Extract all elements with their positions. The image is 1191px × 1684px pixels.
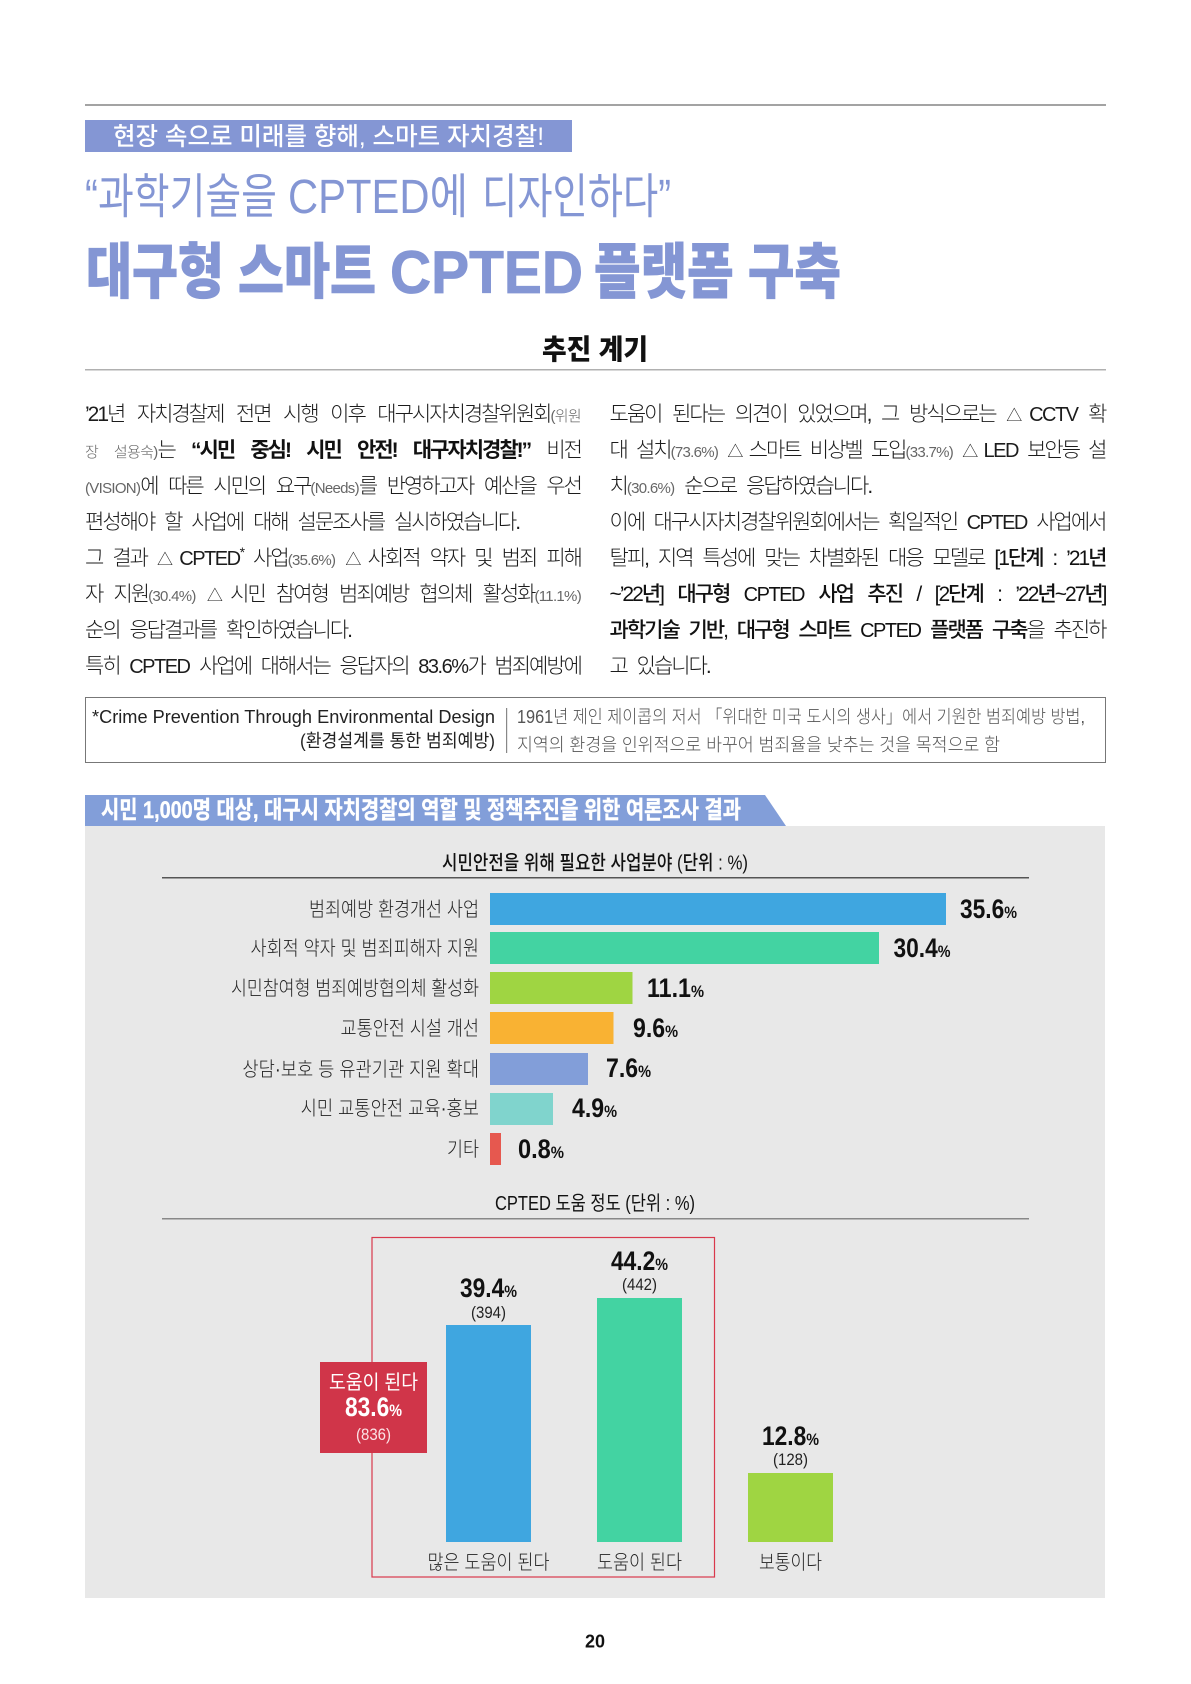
- text block: right column: 도움이 된다는 의견이 있었으며, 그 방식으로는 △CCTV 확: [610, 403, 1106, 426]
- text block: left column: 편성해야 할 사업에 대해 설문조사를 실시하였습니다.: [85, 511, 519, 534]
- bar: counseling and protection: [242, 1053, 651, 1085]
- callout: helpful total: 83.6%: [345, 1392, 402, 1422]
- text block: left column: 순의 응답결과를 확인하였습니다.: [85, 619, 351, 642]
- text block: left column: 특히 CPTED 사업에 대해서는 응답자의 83.6%가 범죄예방에: [85, 655, 581, 678]
- bar: crime prevention environment: 35.6%: [960, 894, 1017, 924]
- bar: traffic education: 4.9%: [572, 1093, 617, 1123]
- column: helpful: (442): [622, 1275, 657, 1294]
- column: helpful: 도움이 된다: [597, 1551, 682, 1574]
- bar: citizen council: [231, 972, 704, 1004]
- column: very helpful: [428, 1273, 550, 1574]
- text block: right column: [610, 403, 1107, 678]
- bar: counseling and protection: 7.6%: [606, 1053, 651, 1083]
- text block: left column: [85, 403, 581, 678]
- column: average: 12.8%: [762, 1421, 819, 1451]
- column: very helpful: 많은 도움이 된다: [428, 1551, 550, 1574]
- chart title: CPTED helpfulness: CPTED 도움 정도 (단위 : %): [495, 1192, 695, 1215]
- bar: citizen council: 11.1%: [647, 973, 704, 1003]
- main title: CPTED: [390, 239, 583, 306]
- bar: vulnerable and victim support: 30.4%: [894, 933, 950, 963]
- bar: traffic education: 시민 교통안전 교육·홍보: [301, 1097, 479, 1120]
- column: helpful: [597, 1246, 682, 1574]
- subtitle: 디자인하다”: [482, 171, 671, 224]
- text block: left column: 그 결과 △CPTED* 사업(35.6%) △사회적 약자 및 범죄 피해: [85, 544, 581, 570]
- text block: left column: 장 설용숙)는 “시민 중심! 시민 안전! 대구자치경찰!” 비전: [85, 439, 581, 462]
- text block: right column: 이에 대구시자치경찰위원회에서는 획일적인 CPTED 사업에서: [610, 511, 1106, 534]
- chart title: needed business areas: 시민안전을 위해 필요한 사업분야 (단위 : %): [442, 852, 748, 874]
- bar: vulnerable and victim support: 사회적 약자 및 범죄피해자 지원: [250, 937, 479, 960]
- bar: vulnerable and victim support: [250, 932, 950, 964]
- section tag: 현장 속으로 미래를 향해, 스마트 자치경찰!: [113, 123, 544, 151]
- text block: left column: (VISION)에 따른 시민의 요구(Needs)를 반영하고자 예산을 우선: [85, 475, 581, 498]
- callout: helpful total: [320, 1362, 427, 1453]
- text block: left column: ’21년 자치경찰제 전면 시행 이후 대구시자치경찰위원회(위원: [85, 403, 581, 426]
- column: average: [748, 1421, 833, 1574]
- main title: 플랫폼 구축: [594, 239, 841, 306]
- bar: traffic safety facilities: 9.6%: [633, 1013, 678, 1043]
- subtitle: [85, 171, 671, 224]
- footnote box: 1961년 제인 제이콥의 저서 「위대한 미국 도시의 생사」에서 기원한 범죄예방 방법,: [517, 707, 1085, 727]
- bar: other: 0.8%: [518, 1134, 564, 1164]
- red bracket frame: [372, 1238, 714, 1577]
- column: average: (128): [773, 1450, 808, 1469]
- bar: traffic safety facilities: 교통안전 시설 개선: [340, 1017, 479, 1040]
- footnote box: [86, 698, 1106, 762]
- bar: other: 기타: [447, 1138, 479, 1161]
- page number: 20: [585, 1632, 605, 1652]
- text block: right column: 과학기술 기반, 대구형 스마트 CPTED 플랫폼 구축을 추진하: [610, 619, 1106, 642]
- callout: helpful total: 도움이 된다: [329, 1371, 418, 1394]
- bar: traffic safety facilities: [340, 1012, 678, 1044]
- bar: counseling and protection: 상담·보호 등 유관기관 지원 확대: [242, 1058, 479, 1081]
- subtitle: “과학기술을: [85, 171, 277, 224]
- callout: helpful total: (836): [356, 1425, 391, 1444]
- subtitle: CPTED에: [288, 171, 468, 224]
- section heading: background: 추진 계기: [542, 334, 648, 365]
- column chart: [320, 1238, 833, 1577]
- footnote box: (환경설계를 통한 범죄예방): [300, 731, 495, 751]
- footnote box: 지역의 환경을 인위적으로 바꾸어 범죄율을 낮추는 것을 목적으로 함: [517, 735, 1000, 755]
- bar: citizen council: 시민참여형 범죄예방협의체 활성화: [231, 977, 479, 1000]
- text block: right column: ~’22년] 대구형 CPTED 사업 추진 / [2단계 : ’22년~27년]: [610, 583, 1106, 606]
- horizontal bar chart: [231, 893, 1017, 1165]
- survey panel background: [85, 826, 1105, 1598]
- column: average: 보통이다: [759, 1551, 822, 1574]
- main title: 대구형 스마트: [86, 239, 376, 306]
- bar: traffic education: [301, 1093, 617, 1125]
- bar: crime prevention environment: 범죄예방 환경개선 사업: [309, 898, 479, 921]
- column: very helpful: (394): [471, 1303, 506, 1322]
- text block: right column: 대 설치(73.6%) △스마트 비상벨 도입(33.7%) △LED 보안등 설: [610, 439, 1106, 462]
- bar: other: [447, 1133, 564, 1165]
- survey banner: 시민 1,000명 대상, 대구시 자치경찰의 역할 및 정책추진을 위한 여론조사 결과: [101, 797, 741, 824]
- bar: crime prevention environment: [309, 893, 1017, 925]
- footnote box: *Crime Prevention Through Environmental Design: [92, 707, 495, 727]
- column: very helpful: 39.4%: [460, 1273, 517, 1303]
- column: helpful: 44.2%: [611, 1246, 668, 1276]
- text block: right column: 탈피, 지역 특성에 맞는 차별화된 대응 모델로 [1단계 : ’21년: [610, 547, 1106, 570]
- text block: left column: 자 지원(30.4%) △시민 참여형 범죄예방 협의체 활성화(11.1%): [85, 583, 581, 606]
- text block: right column: 고 있습니다.: [610, 655, 710, 678]
- text block: right column: 치(30.6%) 순으로 응답하였습니다.: [610, 475, 871, 498]
- main title: [86, 239, 841, 306]
